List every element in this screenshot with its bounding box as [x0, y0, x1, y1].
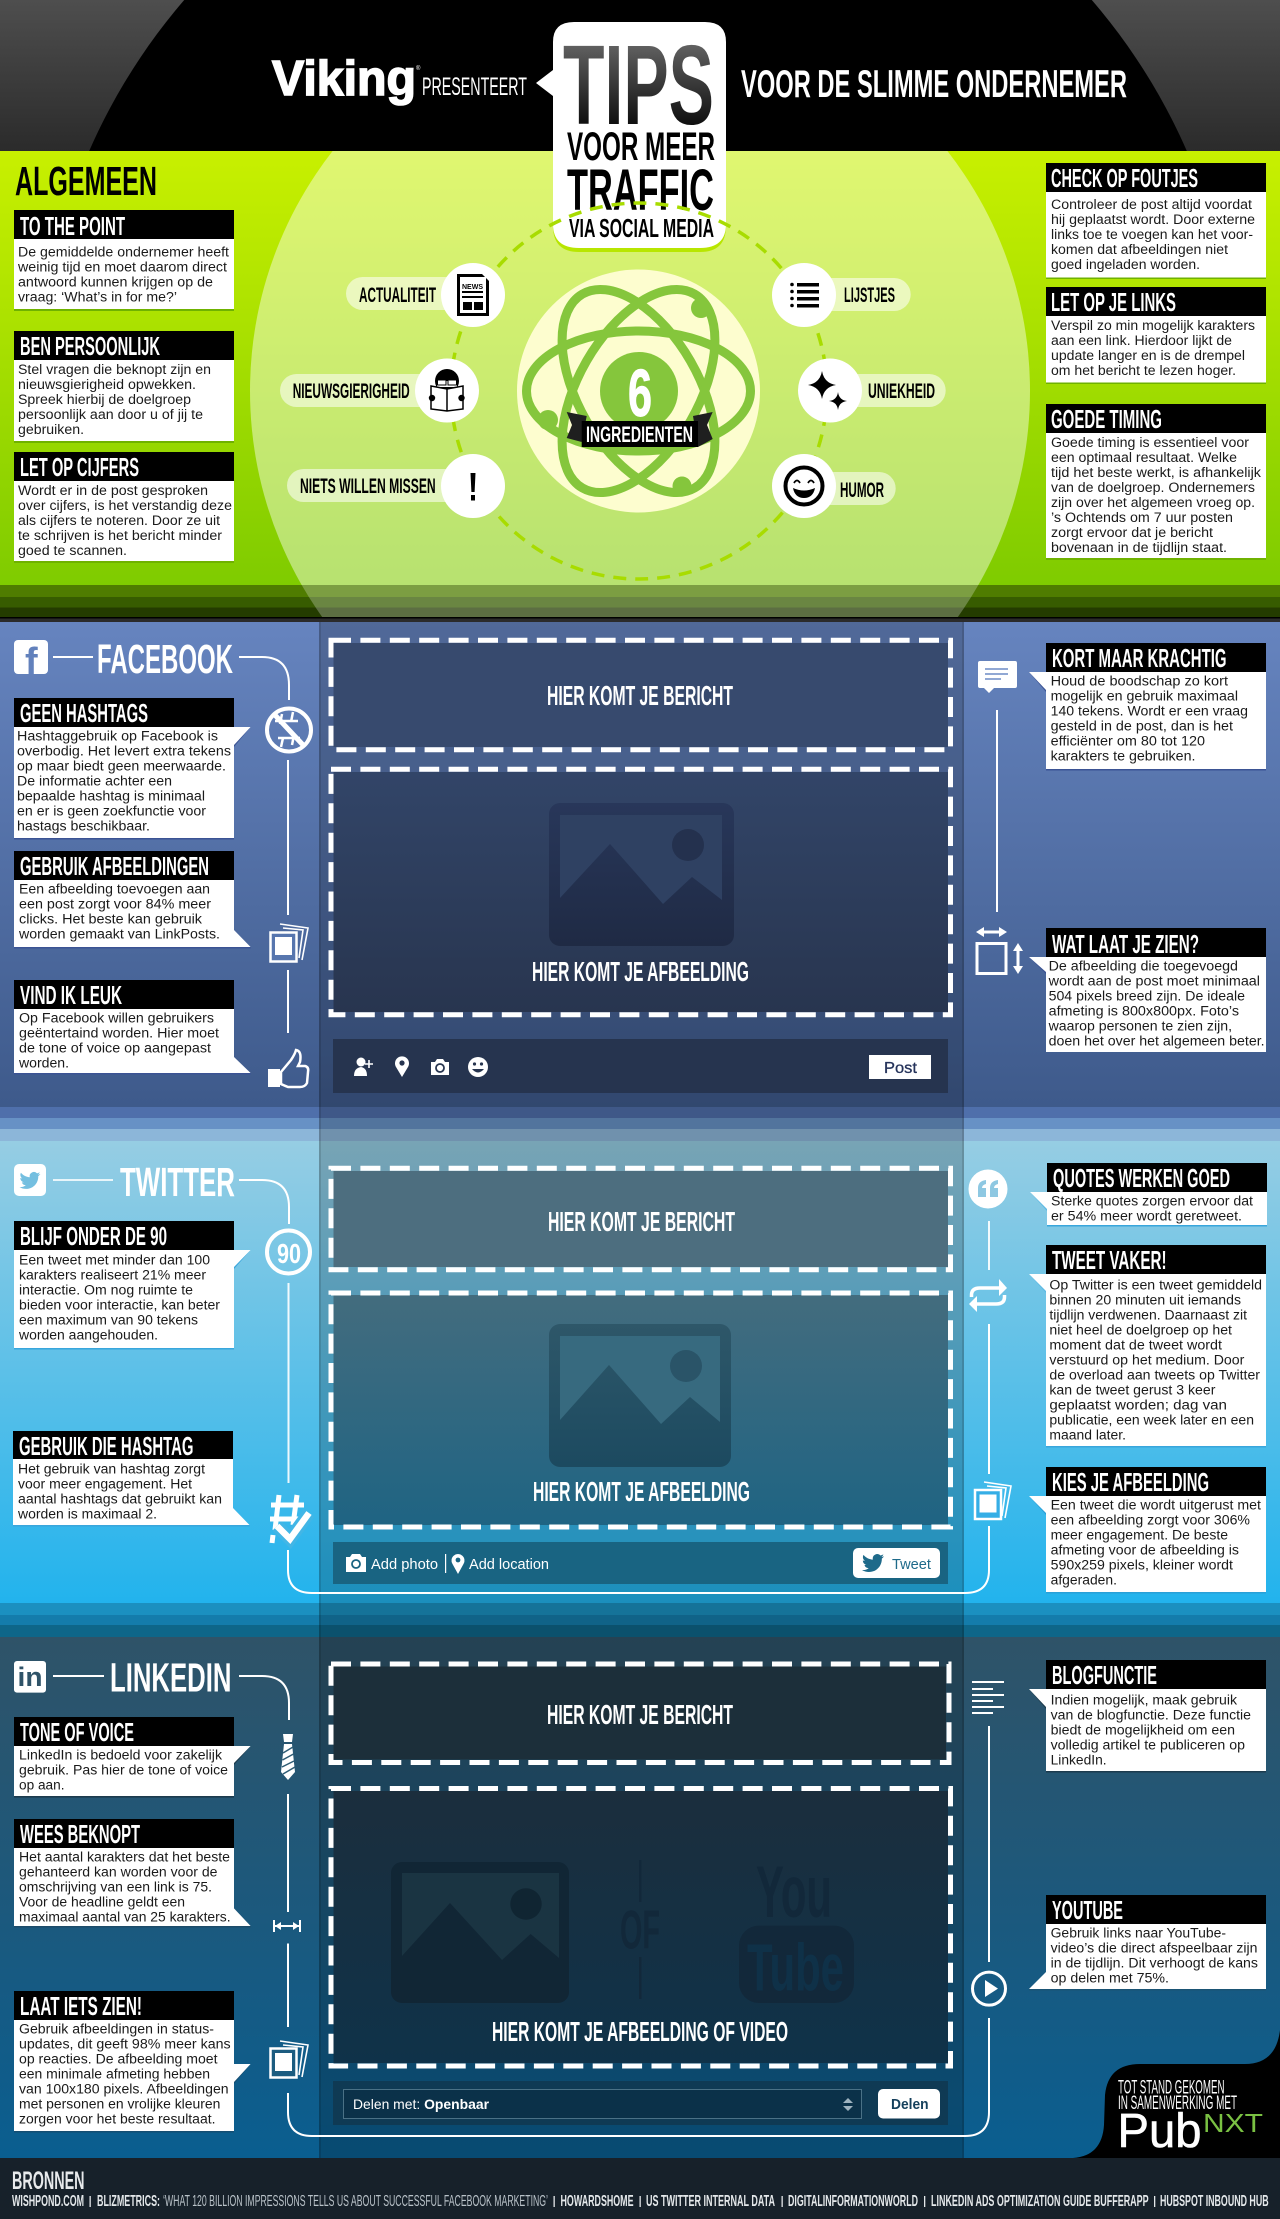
panel: blogfunctie: Indien mogelijk, maak gebruik — [1051, 1692, 1237, 1708]
panel: tone of voice: LinkedIn is bedoeld voor zakelijk — [19, 1748, 222, 1762]
panel: wat laat je zien — [1029, 928, 1266, 1052]
panel: wat laat je zien: wordt aan de post moet minimaal — [1048, 974, 1260, 988]
panel: let op je links: Verspil zo min mogelijk karakters — [1051, 318, 1255, 333]
title badge: TIPS — [563, 22, 714, 148]
composer bar: linkedin: Delen — [891, 2097, 929, 2113]
panel: let op cijfers: LET OP CIJFERS — [20, 452, 139, 482]
panel: ben persoonlijk: Stel vragen die beknopt zijn en — [18, 362, 211, 377]
panel: gebruik die hashtag — [13, 1431, 250, 1526]
panel: kort maar krachtig: karakters te gebruiken. — [1051, 748, 1196, 764]
panel: ben persoonlijk: gebruiken. — [18, 422, 84, 437]
panel: youtube: in de tijdlijn. Dit verhoogt de kans — [1051, 1956, 1258, 1970]
placeholder: linkedin image or video: OF — [620, 1898, 660, 1960]
ingredient: niets willen missen — [287, 454, 505, 518]
panel: goede timing: ’s Ochtends om 7 uur posten — [1051, 510, 1233, 525]
panel: wees beknopt: Voor de headline geldt een — [19, 1894, 185, 1910]
panel: kort maar krachtig: mogelijk en gebruik maximaal — [1051, 688, 1238, 704]
dashed ring — [451, 203, 827, 579]
panel: let op cijfers: goed te scannen. — [18, 543, 127, 558]
panel: laat iets zien: updates, dit geeft 98% meer kans — [19, 2036, 231, 2052]
panel: wees beknopt — [14, 1819, 251, 1928]
panel: blijf onder de 90: BLIJF ONDER DE 90 — [20, 1221, 167, 1251]
panel: vind ik leuk: Op Facebook willen gebruikers — [19, 1010, 214, 1026]
panel: tweet vaker: publicatie, een week later en een — [1049, 1412, 1254, 1428]
panel: kies je afbeelding: Een tweet die wordt uitgerust met — [1051, 1498, 1261, 1512]
connector line — [288, 1283, 290, 1483]
footer: bronnen: ‘WHAT 120 BILLION IMPRESSIONS TELLS US ABOUT SUCCESSFUL FACEBOOK MARKETING’ — [163, 2193, 548, 2210]
icon: text lines — [972, 1681, 1004, 1714]
panel: tone of voice: TONE OF VOICE — [20, 1717, 134, 1747]
panel: check op foutjes: Controleer de post altijd voordat — [1051, 197, 1252, 212]
panel: kort maar krachtig: gesteld in de post, dan is het — [1051, 718, 1233, 734]
footer: bronnen: US TWITTER INTERNAL DATA — [646, 2193, 775, 2210]
panel: geen hashtags — [14, 698, 251, 840]
panel: let op je links: om het bericht te lezen hoger. — [1051, 363, 1236, 378]
panel: ben persoonlijk: Spreek hierbij de doelgroep — [18, 392, 191, 407]
panel: to the point: vraag: ‘What’s in for me?’ — [18, 290, 177, 304]
panel: goede timing: een optimaal resultaat. Welke — [1051, 450, 1237, 465]
panel: tweet vaker: TWEET VAKER! — [1052, 1245, 1166, 1275]
placeholder: facebook message: HIER KOMT JE BERICHT — [547, 680, 733, 711]
panel: blijf onder de 90 — [14, 1221, 251, 1350]
icon: play — [972, 1972, 1006, 2005]
panel: check op foutjes: komen dat afbeeldingen niet — [1051, 242, 1228, 257]
panel: gebruik afbeeldingen: worden gemaakt van LinkPosts. — [18, 926, 220, 942]
panel: tweet vaker: moment dat de tweet wordt — [1049, 1338, 1222, 1352]
panel: gebruik die hashtag: Het gebruik van hashtag zorgt — [18, 1462, 205, 1476]
panel: gebruik die hashtag: worden is maximaal 2. — [17, 1506, 157, 1522]
panel: blogfunctie: LinkedIn. — [1051, 1752, 1107, 1768]
ingredient: actualiteit: ACTUALITEIT — [359, 284, 436, 307]
panel: laat iets zien: LAAT IETS ZIEN! — [20, 1991, 142, 2021]
placeholder: linkedin image or video: Tube — [747, 1930, 844, 2006]
panel: geen hashtags: Hashtaggebruik op Facebook is — [17, 728, 218, 744]
panel: gebruik die hashtag: aantal hashtags dat gebruikt kan — [18, 1492, 222, 1506]
panel: wat laat je zien: De afbeelding die toegevoegd — [1049, 958, 1238, 974]
panel: laat iets zien: met personen en vrolijke kleuren — [19, 2096, 220, 2112]
composer bar: facebook: Post — [884, 1060, 918, 1077]
panel: goede timing: bovenaan in de tijdlijn staat. — [1051, 540, 1227, 555]
panel: kort maar krachtig: Houd de boodschap zo kort — [1051, 674, 1228, 688]
panel: geen hashtags: en er is geen zoekfunctie voor — [17, 804, 207, 818]
ingredient: actualiteit: NEWS — [462, 284, 483, 291]
ingredient: uniekheid — [798, 358, 946, 422]
panel: kies je afbeelding — [1029, 1467, 1266, 1594]
panel: twitter heading: TWITTER — [120, 1159, 235, 1205]
panel: laat iets zien: van 100x180 pixels. Afbeeldingen — [19, 2082, 229, 2096]
panel: kort maar krachtig: 140 tekens. Wordt er een vraag — [1051, 704, 1248, 718]
panel: vind ik leuk: de tone of voice op aangepast — [19, 1040, 211, 1056]
panel: gebruik afbeeldingen: clicks. Het beste kan gebruik — [19, 912, 202, 926]
panel: wat laat je zien: 504 pixels breed zijn. De ideale — [1049, 988, 1245, 1004]
placeholder: twitter image: HIER KOMT JE AFBEELDING — [533, 1476, 750, 1507]
panel: geen hashtags: op maar biedt geen meerwaarde. — [17, 758, 226, 774]
connector line — [287, 1944, 289, 2027]
panel: tweet vaker — [1029, 1245, 1266, 1448]
panel: tweet vaker: maand later. — [1049, 1428, 1126, 1442]
panel: blijf onder de 90: karakters realiseert 21% meer — [19, 1268, 207, 1282]
panel: let op je links — [1046, 287, 1266, 384]
panel: goede timing: Goede timing is essentieel voor — [1051, 435, 1250, 450]
panel: laat iets zien: een minimale afmeting hebben — [19, 2066, 210, 2082]
composer bar: twitter — [333, 1542, 948, 1584]
footer: bronnen: BRONNEN — [12, 2167, 84, 2195]
placeholder: linkedin image or video: HIER KOMT JE AFBEELDING OF VIDEO — [492, 2016, 788, 2047]
panel: tone of voice: op aan. — [19, 1778, 64, 1792]
title badge: VOOR MEER — [567, 125, 715, 169]
icon: tie — [281, 1734, 295, 1780]
panel: check op foutjes: links toe te voegen kan het voor- — [1051, 227, 1253, 242]
panel: tweet vaker: de overload aan tweets op Twitter — [1049, 1368, 1261, 1382]
panel: let op je links: update langer en is de drempel — [1051, 348, 1245, 363]
panel: gebruik afbeeldingen: een post zorgt voor 84% meer — [19, 896, 212, 912]
panel: let op cijfers — [14, 452, 234, 563]
panel: goede timing: GOEDE TIMING — [1051, 404, 1162, 434]
composer bar: linkedin — [333, 2081, 948, 2125]
title badge — [536, 22, 726, 252]
panel: linkedin heading: LINKEDIN — [110, 1654, 231, 1700]
brand: Viking: ® — [416, 65, 421, 72]
icon: width arrow — [274, 1920, 300, 1932]
footer: bronnen — [0, 2158, 1280, 2219]
panel: vind ik leuk: worden. — [18, 1056, 69, 1070]
connector: twitter frame — [288, 1526, 989, 1593]
panel: ben persoonlijk: persoonlijk aan door u of jij te — [18, 407, 203, 422]
panel: geen hashtags: bepaalde hashtag is minimaal — [17, 788, 205, 804]
placeholder: twitter image — [331, 1293, 950, 1527]
panel: linkedin heading — [14, 1654, 289, 1720]
composer bar: twitter: Add photo — [371, 1557, 438, 1573]
ingredient: nieuwsgierigheid — [280, 358, 479, 422]
panel: laat iets zien: zorgen voor het beste resultaat. — [19, 2112, 216, 2126]
heading: algemeen: ALGEMEEN — [15, 158, 157, 204]
panel: blogfunctie: volledig artikel te publiceren op — [1051, 1738, 1245, 1752]
panel: check op foutjes: goed ingeladen worden. — [1051, 257, 1200, 272]
panel: wees beknopt: omschrijving van een link is 75. — [19, 1880, 212, 1894]
composer bar: twitter: Tweet — [892, 1556, 932, 1573]
panel: kies je afbeelding: een afbeelding zorgt voor 306% — [1051, 1512, 1250, 1528]
icon: images — [975, 1482, 1011, 1519]
connector line — [287, 1794, 289, 1912]
panel: let op cijfers: over cijfers, is het verstandig deze — [18, 498, 232, 513]
placeholder: twitter message — [331, 1168, 950, 1270]
panel: wees beknopt: maximaal aantal van 25 karakters. — [19, 1910, 231, 1924]
panel: geen hashtags: overbodig. Het levert extra tekens — [17, 744, 231, 758]
text: presenteert: PRESENTEERT — [422, 73, 527, 101]
panel: gebruik afbeeldingen: GEBRUIK AFBEELDINGEN — [20, 851, 209, 881]
atom: 6 ingredienten: INGREDIENTEN — [586, 422, 693, 447]
ingredient: lijstjes: LIJSTJES — [844, 284, 895, 307]
panel: to the point: TO THE POINT — [20, 211, 125, 241]
panel: let op cijfers: te schrijven is het bericht minder — [18, 528, 223, 543]
ingredient: lijstjes — [772, 263, 911, 327]
panel: gebruik die hashtag: voor meer engagement. Het — [18, 1476, 192, 1492]
ingredient: nieuwsgierigheid: NIEUWSGIERIGHEID — [293, 380, 410, 403]
icon: thumbs up — [268, 1050, 308, 1087]
panel: vind ik leuk — [14, 980, 251, 1074]
connector line — [988, 1324, 990, 1474]
ingredient: niets willen missen: NIETS WILLEN MISSEN — [300, 475, 436, 498]
panel: let op cijfers: als cijfers te noteren. Door ze uit — [18, 513, 220, 528]
panel: blogfunctie — [1029, 1660, 1266, 1772]
panel: vind ik leuk: VIND IK LEUK — [20, 980, 122, 1010]
footer: bronnen: DIGITALINFORMATIONWORLD — [788, 2193, 918, 2210]
placeholder: linkedin image or video — [331, 1788, 950, 2066]
panel: blijf onder de 90: worden aangehouden. — [18, 1328, 158, 1342]
panel: gebruik die hashtag: GEBRUIK DIE HASHTAG — [19, 1431, 194, 1461]
panel: wees beknopt: Het aantal karakters dat het beste — [19, 1850, 230, 1864]
panel: let op je links: aan een link. Hierdoor lijkt de — [1051, 333, 1232, 348]
placeholder: facebook message — [331, 640, 950, 750]
panel: youtube: YOUTUBE — [1052, 1895, 1123, 1925]
panel: quotes werken goed — [1030, 1163, 1267, 1226]
panel: goede timing: van de doelgroep. Ondernemers — [1051, 480, 1255, 495]
panel: youtube: video’s die direct afspeelbaar zijn — [1051, 1940, 1258, 1956]
panel: check op foutjes: hij geplaatst wordt. Door externe — [1051, 212, 1255, 227]
panel: geen hashtags: De informatie achter een — [17, 774, 172, 788]
panel: ben persoonlijk: BEN PERSOONLIJK — [20, 331, 160, 361]
panel: to the point — [14, 210, 234, 311]
panel: let op je links: LET OP JE LINKS — [1051, 287, 1176, 317]
panel: wees beknopt: WEES BEKNOPT — [20, 1819, 140, 1849]
panel: blogfunctie: van de blogfunctie. Deze functie — [1051, 1708, 1251, 1722]
panel background: algemeen — [0, 151, 1280, 622]
panel: kies je afbeelding: meer engagement. De beste — [1051, 1528, 1228, 1542]
panel: blijf onder de 90: bieden voor interactie, kan beter — [19, 1298, 221, 1312]
panel: tweet vaker: verstuurd op het medium. Door — [1049, 1352, 1245, 1368]
panel: twitter heading — [14, 1159, 289, 1224]
connector line — [996, 710, 998, 912]
header background — [0, 0, 1280, 151]
panel: tone of voice — [14, 1717, 251, 1798]
panel: tweet vaker: geplaatst worden; dag van — [1049, 1398, 1227, 1412]
panel: laat iets zien — [14, 1991, 251, 2132]
panel: youtube: Gebruik links naar YouTube- — [1051, 1926, 1226, 1940]
panel: wat laat je zien: doen het over het algemeen beter. — [1049, 1034, 1265, 1048]
section backgrounds — [0, 622, 1280, 2158]
panel: goede timing: zorgt ervoor dat je bericht — [1051, 525, 1213, 540]
panel: linkedin heading: in — [18, 1662, 42, 1692]
panel: kies je afbeelding: afgeraden. — [1051, 1572, 1117, 1588]
panel: goede timing — [1046, 404, 1266, 560]
panel: kies je afbeelding: 590x259 pixels, kleiner wordt — [1051, 1558, 1233, 1572]
panel: geen hashtags: GEEN HASHTAGS — [20, 698, 148, 728]
panel: blijf onder de 90: interactie. Om nog ruimte te — [19, 1282, 193, 1298]
panel: kort maar krachtig — [1029, 643, 1266, 770]
partner badge: PubNXT: Pub — [1118, 2105, 1202, 2158]
icon: 90 characters: 90 — [277, 1238, 301, 1269]
panel: laat iets zien: Gebruik afbeeldingen in status- — [19, 2022, 214, 2036]
panel: blijf onder de 90: Een tweet met minder dan 100 — [19, 1252, 210, 1268]
title badge: VIA SOCIAL MEDIA — [569, 213, 714, 243]
panel: kies je afbeelding: afmeting voor de afbeelding is — [1051, 1542, 1239, 1558]
panel: wat laat je zien: waarop personen te zien zijn, — [1048, 1018, 1232, 1034]
panel: ben persoonlijk: nieuwsgierigheid opwekken. — [18, 377, 196, 392]
icon: quote — [968, 1170, 1008, 1208]
panel: facebook heading — [14, 636, 289, 700]
panel: gebruik afbeeldingen — [14, 851, 251, 948]
placeholder: linkedin message — [331, 1664, 949, 1762]
panel: facebook heading: FACEBOOK — [97, 636, 233, 682]
ingredient: uniekheid: UNIEKHEID — [868, 380, 935, 403]
panel: blogfunctie: BLOGFUNCTIE — [1052, 1660, 1157, 1690]
connector line — [988, 1221, 990, 1270]
panel: goede timing: zijn over het algemeen vroeg op. — [1051, 495, 1255, 510]
atom: 6 ingredienten — [517, 264, 760, 518]
brand: Viking: Viking — [272, 52, 416, 106]
partner badge: PubNXT — [1073, 2030, 1280, 2158]
icon: images — [270, 924, 308, 962]
connector line — [287, 760, 289, 915]
ingredient: actualiteit — [346, 263, 505, 327]
composer bar: facebook — [333, 1039, 948, 1093]
connector line — [988, 1726, 990, 1962]
panel: to the point: antwoord kunnen krijgen op de — [18, 274, 213, 290]
panel: quotes werken goed: er 54% meer wordt geretweet. — [1051, 1208, 1242, 1224]
panel: gebruik afbeeldingen: Een afbeelding toevoegen aan — [19, 882, 210, 896]
panel: to the point: De gemiddelde ondernemer heeft — [18, 244, 229, 260]
icon: no hashtags — [267, 708, 311, 752]
connector: linkedin frame — [288, 2018, 989, 2136]
title badge: TRAFFIC — [567, 158, 714, 223]
panel: vind ik leuk: geëntertaind worden. Hier moet — [19, 1026, 219, 1040]
panel: to the point: weinig tijd en moet daarom direct — [17, 260, 227, 274]
placeholder: linkedin message: HIER KOMT JE BERICHT — [547, 1699, 733, 1730]
panel: tweet vaker: kan de tweet gerust 3 keer — [1049, 1382, 1216, 1398]
panel: facebook heading: f — [25, 641, 38, 683]
placeholder: linkedin image or video: You — [756, 1852, 832, 1933]
panel: check op foutjes — [1046, 163, 1266, 279]
panel: quotes werken goed: Sterke quotes zorgen ervoor dat — [1051, 1194, 1253, 1208]
panel: tone of voice: gebruik. Pas hier de tone of voice — [19, 1762, 228, 1778]
panel: youtube: op delen met 75%. — [1051, 1970, 1169, 1986]
ingredient: humor: HUMOR — [840, 479, 884, 502]
ingredient: humor — [772, 454, 896, 518]
icon: images — [270, 2041, 308, 2078]
placeholder: facebook image — [331, 769, 950, 1015]
panel: youtube — [1029, 1895, 1266, 1990]
panel: ben persoonlijk — [14, 331, 234, 443]
panel: let op cijfers: Wordt er in de post gesproken — [18, 483, 208, 498]
panel: kort maar krachtig: efficiënter om 80 tot 120 — [1051, 734, 1205, 748]
atom: 6 ingredienten: 6 — [628, 356, 652, 431]
connector line — [287, 970, 289, 1033]
footer: bronnen: HOWARDSHOME — [560, 2193, 634, 2210]
icon: hashtag check — [270, 1495, 309, 1543]
panel: tweet vaker: tijdlijn verdwenen. Daarnaast zit — [1049, 1308, 1247, 1322]
panel: laat iets zien: op reacties. De afbeelding moet — [19, 2052, 218, 2066]
panel: geen hashtags: hastags beschikbaar. — [17, 818, 150, 834]
icon: 90 characters — [267, 1230, 310, 1274]
panel: tweet vaker: Op Twitter is een tweet gemiddeld — [1049, 1278, 1262, 1292]
panel: wees beknopt: gehanteerd kan worden voor de — [19, 1864, 218, 1880]
icon: image dimensions — [976, 927, 1023, 974]
panel: tweet vaker: binnen 20 minuten uit iemands — [1049, 1292, 1241, 1308]
panel: wat laat je zien: afmeting is 800x800px. Foto’s — [1049, 1004, 1239, 1018]
panel: blogfunctie: biedt de mogelijkheid om een — [1051, 1722, 1235, 1738]
footer: bronnen: WISHPOND.COM — [12, 2193, 84, 2210]
icon: speech bubble — [978, 661, 1017, 693]
partner badge: PubNXT: NXT — [1203, 2108, 1263, 2138]
footer: bronnen: BLIZMETRICS: — [97, 2193, 160, 2210]
placeholder: facebook image: HIER KOMT JE AFBEELDING — [532, 956, 749, 987]
panel: goede timing: tijd het beste werkt, is afhankelijk — [1051, 465, 1261, 480]
panel: blijf onder de 90: een maximum van 90 tekens — [19, 1312, 198, 1328]
icon: retweet — [969, 1279, 1007, 1312]
composer bar: linkedin: Delen met: Openbaar — [353, 2096, 490, 2112]
composer bar: twitter: Add location — [469, 1557, 549, 1573]
panel: tweet vaker: niet heel de doelgroep op het — [1049, 1322, 1232, 1338]
placeholder: twitter message: HIER KOMT JE BERICHT — [548, 1206, 735, 1237]
